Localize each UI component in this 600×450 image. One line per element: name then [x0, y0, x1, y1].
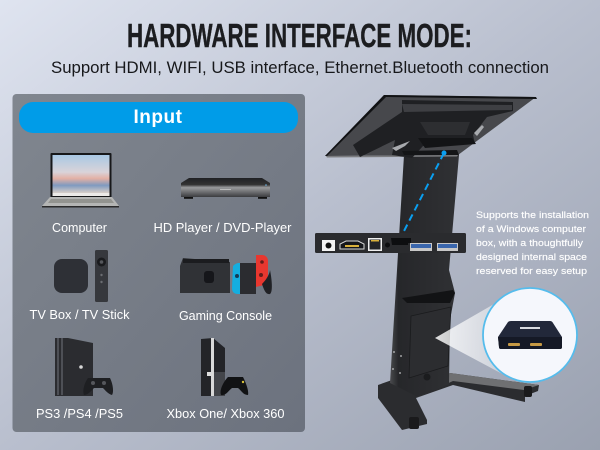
- label: computer: Computer: [52, 221, 107, 235]
- label: PS: PS3 /PS4 /PS5: [36, 407, 123, 421]
- kiosk stand: [315, 95, 539, 430]
- description text: of a Windows computer: [476, 224, 586, 235]
- icon: game console: [180, 255, 272, 294]
- port panel: [315, 233, 466, 253]
- access door: [409, 307, 451, 378]
- DC port: [322, 240, 335, 251]
- panel: input devices: [12, 94, 305, 432]
- input heading pill: [19, 102, 298, 133]
- dashed connector line: [403, 150, 446, 233]
- icon: TV box and remote: [54, 250, 108, 302]
- label: HD player: HD Player / DVD-Player: [154, 221, 292, 235]
- icon: mini PC: [498, 321, 562, 349]
- description text: designed internal space: [476, 252, 587, 263]
- screws: [392, 351, 402, 374]
- stand column: [390, 155, 459, 397]
- icon: laptop: [42, 153, 119, 208]
- stand base: [378, 373, 539, 430]
- label: Xbox: Xbox One/ Xbox 360: [166, 407, 285, 421]
- Ethernet port: [368, 238, 382, 251]
- description text: Supports the installation: [476, 210, 589, 221]
- label: gaming console: Gaming Console: [179, 309, 272, 323]
- display back: [325, 95, 537, 158]
- description text: box, with a thoughtfully: [476, 238, 583, 249]
- subtitle: Support HDMI, WIFI, USB interface, Ethernet.Bluetooth connection: [51, 59, 549, 77]
- description text: reserved for easy setup: [476, 266, 587, 277]
- callout: internal computer box: [435, 288, 577, 382]
- icon: DVD player: [181, 178, 270, 199]
- USB port: [437, 243, 458, 251]
- SD slot: [391, 238, 411, 245]
- HDMI port: [340, 241, 364, 249]
- icon: Xbox: [201, 338, 248, 396]
- icon: PlayStation: [55, 338, 113, 396]
- callout cone: [435, 296, 510, 378]
- callout circle: [483, 288, 577, 382]
- label: TV box: TV Box / TV Stick: [30, 308, 130, 322]
- USB port: [410, 243, 432, 251]
- description text: [476, 210, 589, 277]
- input heading pill: Input: [134, 107, 183, 128]
